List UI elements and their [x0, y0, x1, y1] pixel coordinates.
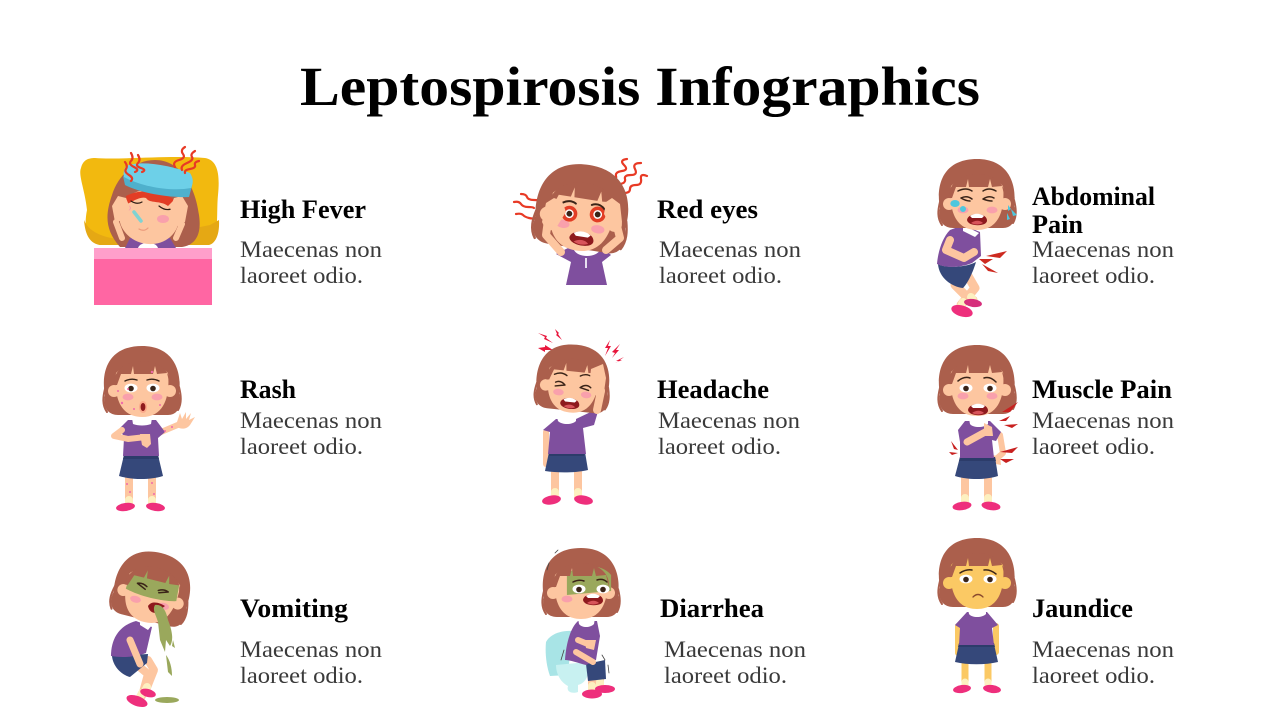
- description: [659, 237, 802, 288]
- description: [240, 237, 383, 288]
- heading: Headache: [657, 375, 769, 404]
- description: Maecenas non: [664, 637, 807, 662]
- description: Maecenas non: [240, 237, 383, 262]
- panel: vomiting: [107, 544, 383, 709]
- panel: jaundice: [938, 538, 1175, 694]
- heading: Abdominal: [1032, 182, 1155, 211]
- description: laoreet odio.: [659, 263, 782, 288]
- heading: Jaundice: [1032, 594, 1133, 623]
- icon: girl with red eyes: [514, 158, 647, 285]
- heading: Muscle Pain: [1032, 375, 1173, 404]
- heading: Diarrhea: [660, 594, 764, 623]
- panel: muscle pain: [938, 345, 1175, 511]
- title: Leptospirosis Infographics: [300, 56, 980, 117]
- panel: abdominal pain: [937, 159, 1175, 319]
- icon: girl in bed with fever: [80, 147, 219, 305]
- heading: Pain: [1032, 210, 1084, 239]
- description: [240, 637, 383, 688]
- description: [1032, 408, 1175, 459]
- panel: headache: [533, 329, 801, 506]
- heading: High Fever: [240, 195, 366, 224]
- icon: girl with headache: [533, 329, 624, 506]
- heading: Rash: [240, 375, 297, 404]
- heading: [1032, 182, 1155, 239]
- description: laoreet odio.: [240, 663, 363, 688]
- description: laoreet odio.: [240, 434, 363, 459]
- description: [1032, 637, 1175, 688]
- panel: high fever: [80, 147, 383, 305]
- icon: girl vomiting: [107, 544, 199, 709]
- description: Maecenas non: [1032, 637, 1175, 662]
- description: laoreet odio.: [1032, 434, 1155, 459]
- description: Maecenas non: [658, 408, 801, 433]
- description: laoreet odio.: [1032, 663, 1155, 688]
- description: [1032, 237, 1175, 288]
- description: Maecenas non: [1032, 237, 1175, 262]
- heading: Vomiting: [240, 594, 348, 623]
- icon: girl on toilet: [542, 548, 620, 698]
- description: Maecenas non: [240, 637, 383, 662]
- icon: yellow-skinned girl: [938, 538, 1016, 694]
- heading: Red eyes: [657, 195, 758, 224]
- icon: girl with rash: [103, 346, 195, 512]
- panel: diarrhea: [542, 548, 807, 698]
- description: Maecenas non: [1032, 408, 1175, 433]
- description: laoreet odio.: [664, 663, 787, 688]
- description: laoreet odio.: [1032, 263, 1155, 288]
- panel: red eyes: [514, 158, 802, 288]
- description: laoreet odio.: [240, 263, 363, 288]
- icon: girl holding abdomen: [937, 159, 1017, 319]
- description: Maecenas non: [240, 408, 383, 433]
- description: Maecenas non: [659, 237, 802, 262]
- description: [240, 408, 383, 459]
- description: laoreet odio.: [658, 434, 781, 459]
- icon: girl with muscle pain: [938, 345, 1018, 511]
- description: [664, 637, 807, 688]
- panel: rash: [103, 346, 383, 512]
- description: [658, 408, 801, 459]
